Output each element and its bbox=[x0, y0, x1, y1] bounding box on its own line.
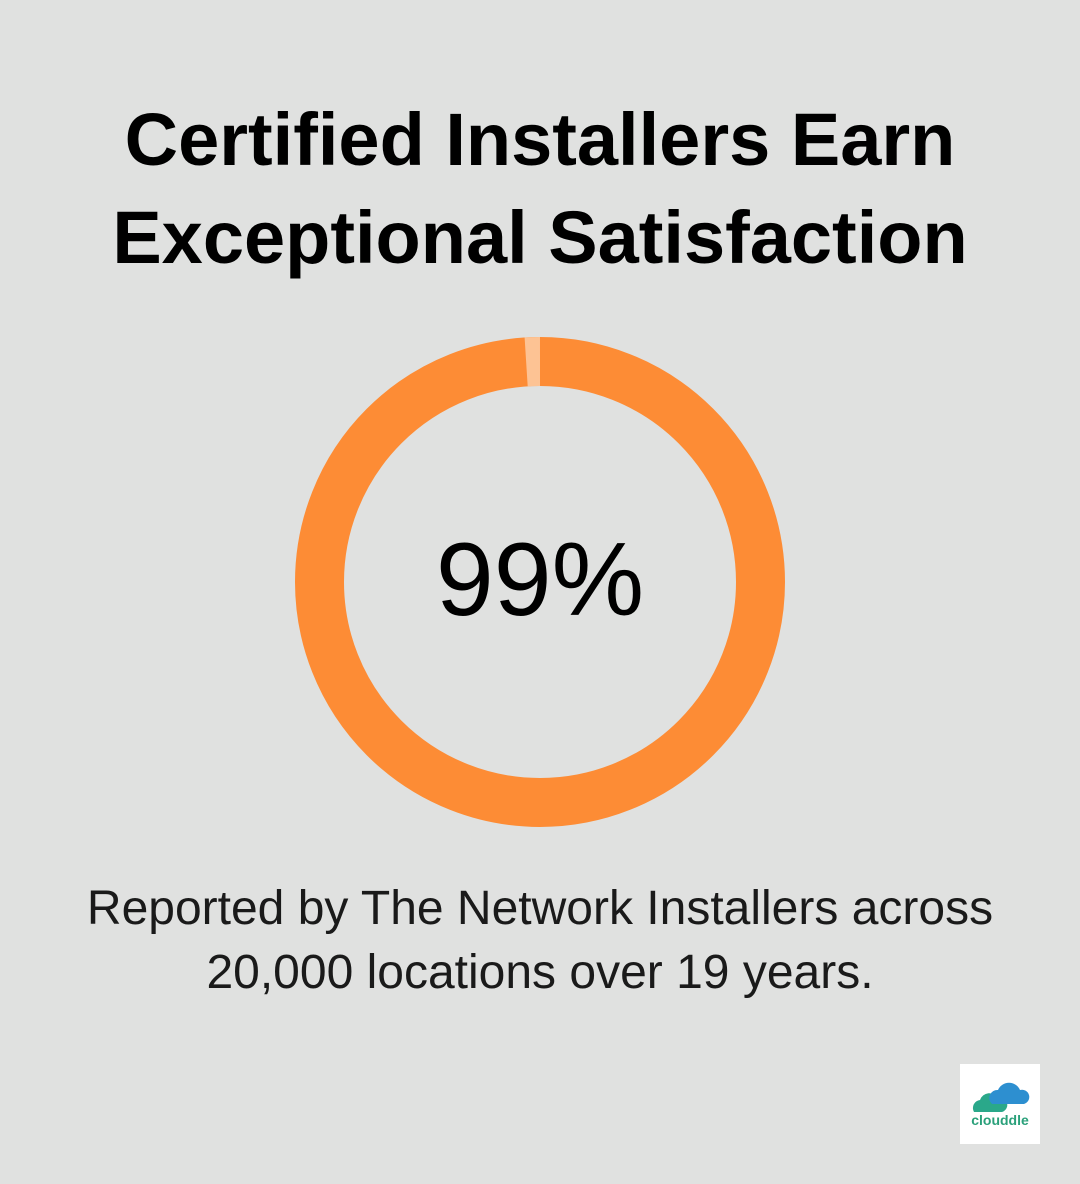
title: Exceptional Satisfaction bbox=[112, 196, 968, 279]
logo: clouddle bbox=[960, 1064, 1040, 1144]
title bbox=[112, 98, 968, 279]
subtitle text bbox=[87, 882, 993, 999]
subtitle text: 20,000 locations over 19 years. bbox=[206, 946, 874, 999]
title: Certified Installers Earn bbox=[125, 98, 955, 181]
subtitle text: Reported by The Network Installers across bbox=[87, 882, 993, 935]
percentage label: 99% bbox=[436, 522, 644, 638]
logo: clouddle: clouddle bbox=[971, 1112, 1029, 1128]
